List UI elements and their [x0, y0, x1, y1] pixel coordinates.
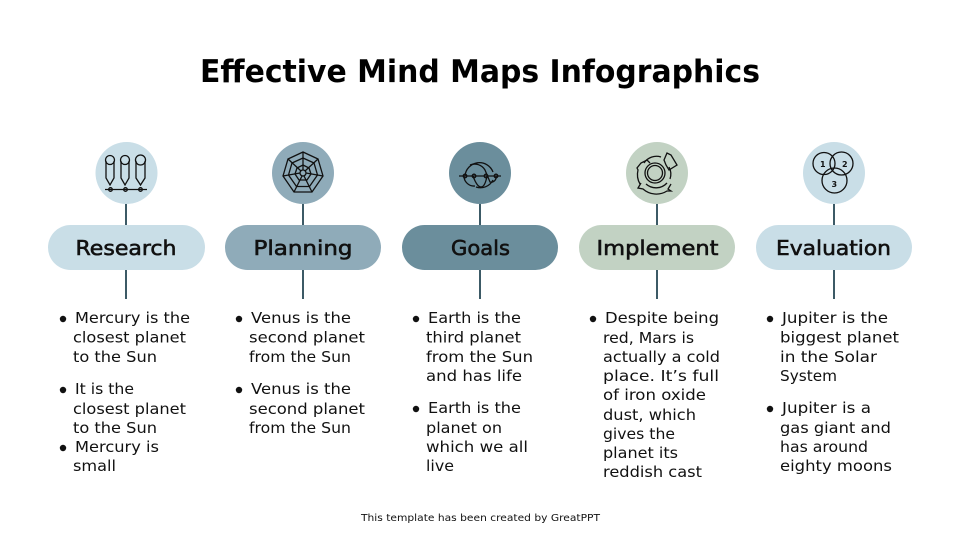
text: Planning bullets: Venus is the — [251, 380, 351, 398]
text: Implement bullets: place. It’s full — [603, 367, 719, 385]
text: Planning bullets: from the Sun — [249, 348, 351, 366]
pill: Goals — [402, 225, 558, 270]
text: Goals bullets: Earth is the — [428, 309, 521, 327]
icon: venn diagram: 1 — [820, 160, 826, 169]
text: Implement bullets: red, Mars is — [603, 329, 694, 347]
text: Goals bullets: which we all — [426, 438, 528, 456]
text: Evaluation bullets: gas giant and — [780, 419, 891, 437]
text: Research bullets: closest planet — [73, 328, 186, 346]
text: Goals bullets: Earth is the — [428, 399, 521, 417]
text: Research bullets: to the Sun — [73, 419, 157, 437]
icon: radar web — [272, 142, 334, 204]
pill: Planning — [225, 225, 381, 270]
text: Implement bullets — [590, 309, 720, 481]
text: Implement bullets: reddish cast — [603, 463, 702, 481]
text: Goals bullets: from the Sun — [426, 348, 533, 366]
pill: Research: Research — [76, 236, 176, 260]
icon: venn diagram: 3 — [832, 180, 837, 189]
pill: Evaluation — [756, 225, 912, 270]
column: Evaluation — [756, 142, 912, 475]
text: Evaluation bullets: Jupiter is the — [781, 309, 888, 327]
column: Implement — [579, 142, 735, 481]
icon: research chart — [96, 142, 158, 204]
icon: venn diagram — [803, 142, 865, 204]
text: Goals bullets: planet on — [426, 419, 502, 437]
text: Implement bullets: Despite being — [605, 309, 719, 327]
text: Research bullets — [60, 309, 190, 475]
text: Implement bullets: actually a cold — [603, 348, 720, 366]
text: Implement bullets: gives the — [603, 425, 675, 443]
column: Goals — [402, 142, 558, 475]
text: Evaluation bullets: Jupiter is a — [781, 399, 871, 417]
text: Evaluation bullets: in the Solar — [780, 348, 878, 366]
text: Evaluation bullets: eighty moons — [780, 457, 892, 475]
pill: Implement — [579, 225, 735, 270]
pill: Implement: Implement — [596, 236, 718, 260]
text: Goals bullets: third planet — [426, 328, 521, 346]
text: Research bullets: closest planet — [73, 400, 186, 418]
text: Research bullets: small — [73, 457, 116, 475]
icon: venn diagram: 2 — [842, 160, 848, 169]
text: Planning bullets — [236, 309, 365, 437]
text: Implement bullets: dust, which — [603, 406, 696, 424]
title: Effective Mind Maps Infographics — [200, 54, 760, 90]
text: Planning bullets: second planet — [249, 328, 365, 346]
icon: overlapping arcs — [449, 142, 511, 204]
footer credit: This template has been created by GreatPPT — [360, 513, 601, 524]
pill: Planning: Planning — [254, 236, 352, 260]
pill: Research — [48, 225, 205, 270]
text: Planning bullets: from the Sun — [249, 419, 351, 437]
text: Goals bullets: live — [426, 457, 454, 475]
text: Research bullets: to the Sun — [73, 348, 157, 366]
text: Research bullets: Mercury is the — [75, 309, 190, 327]
text: Planning bullets: second planet — [249, 400, 365, 418]
text: Research bullets: It is the — [75, 380, 134, 398]
column: Research — [48, 142, 205, 475]
text: Evaluation bullets: biggest planet — [780, 328, 899, 346]
text: Goals bullets — [413, 309, 533, 475]
text: Research bullets: Mercury is — [75, 438, 159, 456]
pill: Goals: Goals — [451, 236, 510, 260]
pill: Evaluation: Evaluation — [776, 236, 891, 260]
text: Evaluation bullets — [767, 309, 899, 475]
icon: circular segments — [626, 142, 688, 204]
text: Goals bullets: and has life — [426, 367, 522, 385]
text: Implement bullets: planet its — [603, 444, 678, 462]
text: Evaluation bullets: has around — [780, 438, 868, 456]
text: Planning bullets: Venus is the — [251, 309, 351, 327]
text: Evaluation bullets: System — [780, 367, 837, 385]
text: Implement bullets: of iron oxide — [603, 386, 706, 404]
column: Planning — [225, 142, 381, 437]
